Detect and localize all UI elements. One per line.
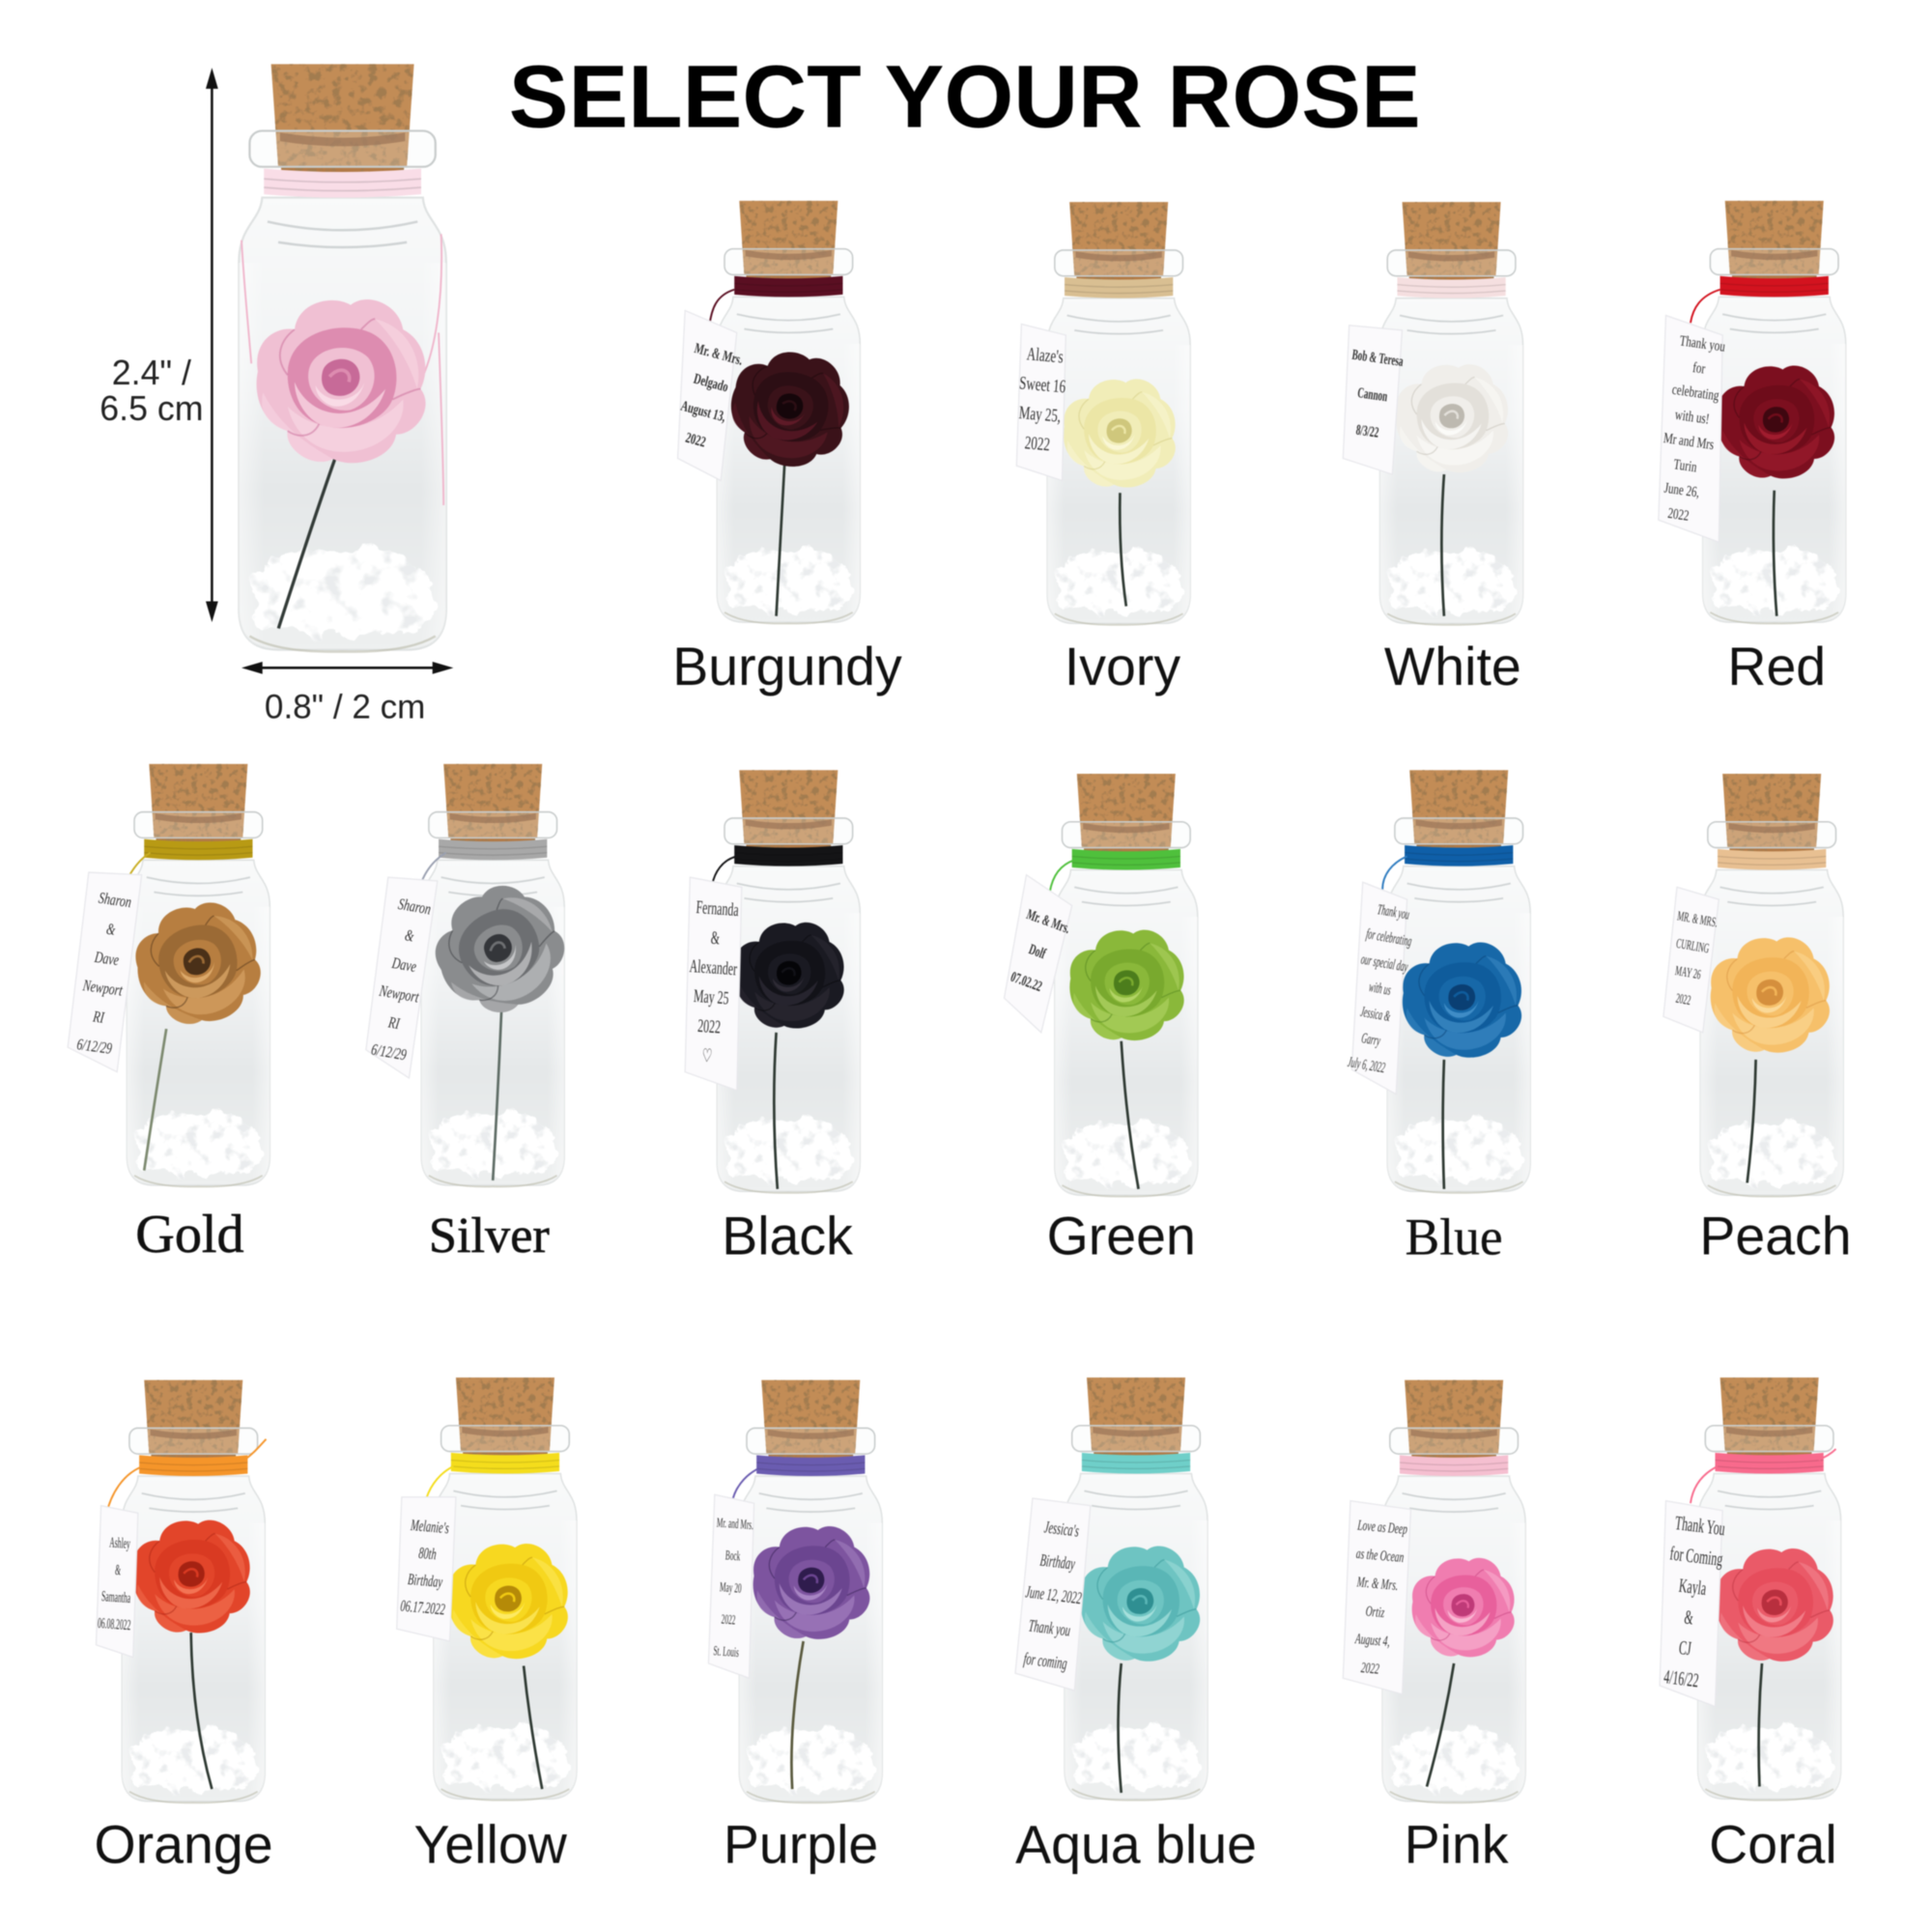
bottle: Burgundy: Burgundy [672, 637, 902, 696]
bottle: Purple [707, 1380, 882, 1875]
arrow: width [242, 662, 453, 674]
bottle: Black: Black [722, 1206, 853, 1265]
bottle: Silver: 6/12/29 [370, 1041, 408, 1065]
bottle: Aqua blue: Jessica's [1043, 1519, 1080, 1542]
bottle: Purple: Mr. and Mrs. [716, 1516, 754, 1533]
bottle: Silver: Silver [429, 1208, 550, 1264]
bottle: Red: Turin [1673, 456, 1698, 475]
bottle: Burgundy: Delgado [692, 370, 730, 395]
bottle: Blue: Jessica & [1359, 1003, 1392, 1025]
bottle: Coral: Coral [1709, 1815, 1837, 1875]
bottle: White: Bob & Teresa [1351, 346, 1405, 370]
bottle: Ivory [1013, 202, 1190, 696]
height dimension text: 6.5 cm [99, 389, 203, 428]
bottle: Ivory: Sweet 16 [1018, 372, 1066, 397]
bottle: Yellow [397, 1378, 577, 1875]
bottle: Pink: as the Ocean [1355, 1546, 1405, 1566]
bottle: Green [1003, 774, 1198, 1265]
bottle: Gold [68, 764, 270, 1264]
bottle: Purple: 2022 [721, 1612, 736, 1628]
bottle: Purple: Bock [724, 1548, 741, 1564]
bottle: Blue: with us [1368, 978, 1392, 999]
bottle: Black: May 25 [693, 986, 729, 1009]
bottle: Gold: Sharon [98, 890, 132, 912]
bottle: Ivory: May 25, [1018, 402, 1062, 426]
bottle: Burgundy [669, 201, 902, 696]
bottle: Aqua blue: Aqua blue [1015, 1815, 1257, 1875]
bottle: Black: 2022 [697, 1016, 722, 1037]
bottle: Pink [1343, 1380, 1525, 1875]
bottle: Blue: Blue [1406, 1208, 1503, 1265]
bottle: Silver: RI [386, 1014, 402, 1034]
bottle: Pink: Pink [1405, 1815, 1509, 1875]
bottle: Aqua blue [1015, 1378, 1257, 1875]
panel: size reference bottle [239, 64, 446, 652]
bottle: Yellow: 80th [418, 1544, 438, 1563]
bottle: Silver: Newport [377, 982, 421, 1007]
bottle: Gold: Newport [81, 977, 125, 1000]
bottle: Coral: CJ [1678, 1636, 1692, 1660]
bottle: Blue [1342, 770, 1530, 1265]
bottle: White: 8/3/22 [1355, 421, 1379, 440]
bottle: Orange: & [115, 1561, 122, 1578]
bottle: Coral: for Coming [1668, 1542, 1724, 1571]
bottle: Blue: our special day [1360, 951, 1409, 976]
bottle: Yellow: Melanie's [410, 1516, 450, 1537]
bottle: Coral: & [1683, 1605, 1694, 1629]
bottle: Purple: May 20 [720, 1580, 742, 1597]
bottle: Green: Dolf [1027, 941, 1048, 962]
bottle: White: Cannon [1356, 384, 1388, 405]
bottle: Burgundy: August 13, [679, 397, 727, 425]
bottle: Red: Thank you [1679, 332, 1726, 355]
bottle: Orange: Ashley [109, 1533, 131, 1552]
bottle: Aqua blue: Thank you [1028, 1617, 1071, 1641]
bottle: Pink: Ortiz [1365, 1603, 1385, 1621]
title: SELECT YOUR ROSE [509, 47, 1421, 146]
stem [278, 458, 335, 629]
bottle: Peach: Peach [1699, 1206, 1852, 1265]
bottle: Black: Alexander [689, 956, 738, 980]
bottle: Black: ♡ [701, 1046, 713, 1066]
bottle: White: White [1384, 637, 1521, 696]
bottle: Red: June 26, [1663, 479, 1701, 500]
bottle: Silver: Sharon [397, 895, 432, 919]
bottle: Ivory: Alaze's [1026, 343, 1065, 367]
bottle: Pink: Love as Deep [1356, 1517, 1408, 1538]
bottle: Aqua blue: June 12, 2022 [1024, 1583, 1083, 1608]
bottle: Silver: & [404, 926, 415, 946]
pink thread [242, 234, 443, 505]
bottle: Gold: Dave [93, 949, 121, 970]
bottle: Peach: MR. & MRS. [1676, 909, 1719, 930]
bottle: Silver: Dave [390, 954, 418, 977]
bottle: Ivory: Ivory [1065, 637, 1180, 696]
icon: large bottle [239, 64, 446, 652]
bottle: Pink: 2022 [1360, 1660, 1380, 1677]
width dimension text: 0.8" / 2 cm [265, 689, 425, 726]
bottle: Red: celebrating [1671, 381, 1720, 404]
bottle: Orange [95, 1380, 273, 1875]
bottle: Pink: Mr. & Mrs. [1355, 1574, 1399, 1594]
bottle: Green: Mr. & Mrs. [1024, 906, 1072, 937]
bottle: Peach: MAY 26 [1674, 964, 1702, 982]
bottle: Black: Fernanda [696, 897, 739, 921]
bottle: Peach: 2022 [1675, 992, 1692, 1009]
bottle: Aqua blue: for coming [1023, 1650, 1068, 1674]
bottle: Gold: RI [91, 1009, 106, 1028]
bottle: Ivory: 2022 [1024, 432, 1051, 455]
bottle: Orange: 06.08.2022 [97, 1614, 131, 1634]
arrow: height [206, 68, 218, 622]
bottle: Aqua blue: Birthday [1039, 1551, 1076, 1575]
bottle: Black: & [710, 928, 721, 949]
bottle: Blue: July 6, 2022 [1347, 1053, 1386, 1076]
large rose [257, 299, 426, 463]
bottle: Red: Red [1727, 637, 1826, 696]
bottle: Green: Green [1047, 1206, 1196, 1265]
height dimension text: 2.4" / [112, 354, 191, 392]
bottle: Red: with us! [1674, 406, 1711, 427]
bottle: Coral [1654, 1378, 1841, 1875]
bottle: Black [683, 770, 860, 1265]
bottle: Red: 2022 [1666, 504, 1690, 524]
bottle: Red [1652, 201, 1846, 696]
bottle: Yellow: Yellow [413, 1815, 568, 1875]
bottle: Orange: Samantha [101, 1587, 131, 1606]
bottle: Orange: Orange [95, 1815, 273, 1875]
bottle: Green: 07.02.22 [1009, 969, 1044, 995]
bottle: Coral: Thank You [1674, 1512, 1727, 1540]
bottle: Peach [1662, 774, 1852, 1265]
bottle: White [1341, 202, 1523, 696]
bottle: Pink: August 4, [1354, 1631, 1391, 1650]
bottle: Purple: Purple [724, 1815, 878, 1875]
bottle: Yellow: 06.17.2022 [400, 1597, 446, 1618]
bottle: Coral: Kayla [1678, 1574, 1708, 1600]
bottle: Red: for [1691, 358, 1707, 377]
bottle: Blue: Garry [1360, 1029, 1382, 1049]
bottle: Red: Mr and Mrs [1662, 429, 1715, 453]
bottle: Silver [366, 764, 581, 1264]
bottle: Purple: St. Louis [713, 1644, 739, 1661]
bottle: Yellow: Birthday [407, 1571, 443, 1591]
bottle: Burgundy: 2022 [684, 429, 708, 450]
bottle: Blue: for celebrating [1365, 925, 1413, 950]
bottle: Blue: Thank you [1377, 900, 1410, 923]
bottle: Burgundy: Mr. & Mrs. [693, 339, 745, 368]
bottle: Gold: & [105, 921, 117, 940]
bottle: Gold: Gold [135, 1205, 244, 1264]
bottle: Coral: 4/16/22 [1662, 1665, 1700, 1691]
bottle: Gold: 6/12/29 [75, 1036, 113, 1059]
bottle: Peach: CURLING [1675, 937, 1710, 956]
